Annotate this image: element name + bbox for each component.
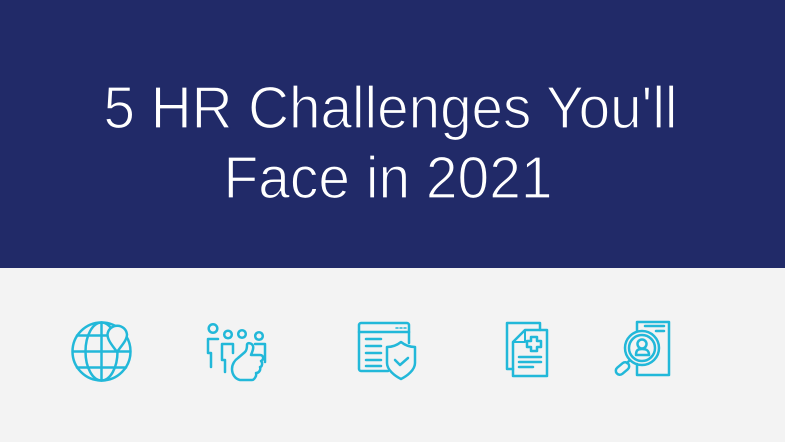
icon: magnifier over resume	[614, 322, 669, 376]
icon: globe with map pin	[72, 322, 130, 380]
header panel	[0, 0, 785, 268]
footer panel	[0, 268, 785, 442]
icon: browser window with shield	[359, 323, 415, 379]
icon: medical documents	[507, 323, 547, 376]
title: 5 HR Challenges You'll	[104, 75, 678, 141]
title: Face in 2021	[224, 145, 552, 211]
title	[104, 75, 678, 211]
icon: team with thumbs up	[208, 324, 265, 380]
